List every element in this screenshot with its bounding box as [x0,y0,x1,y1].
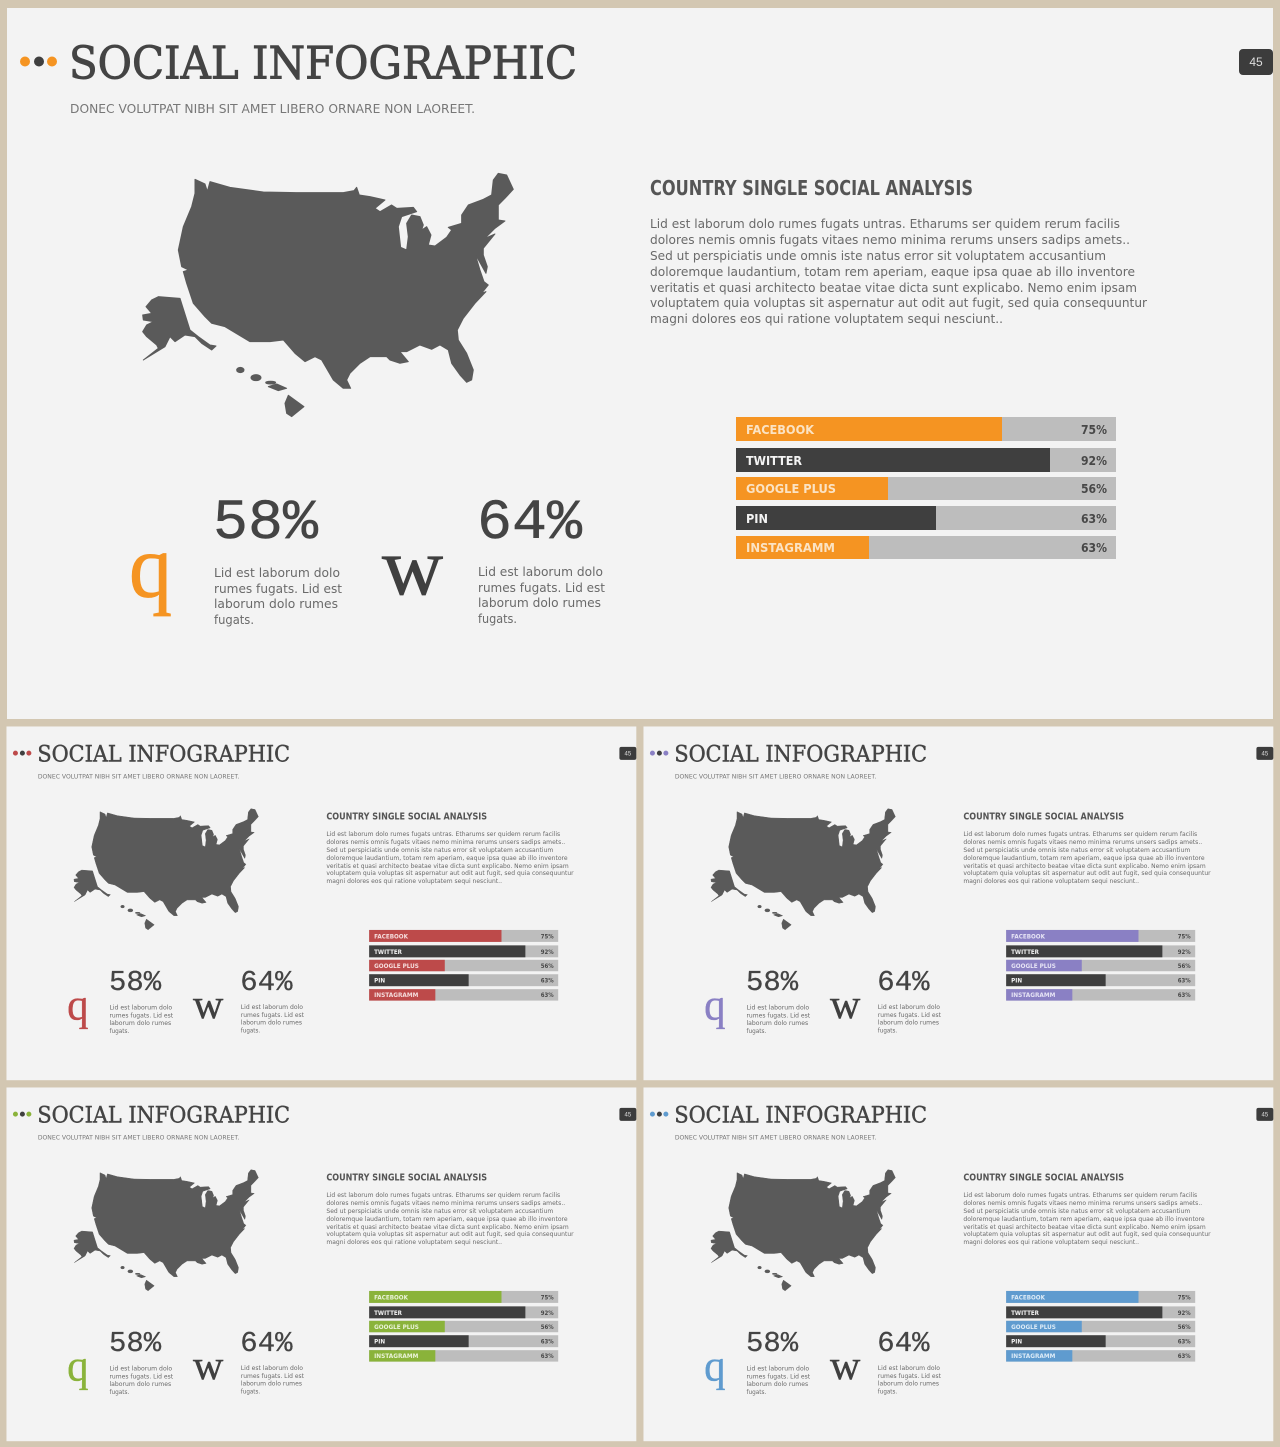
page number badge [619,1108,636,1121]
analysis text: veritatis et quasi architecto beatae vitae dicta sunt explicabo. Nemo enim ipsam [963,863,1206,870]
subtitle: DONEC VOLUTPAT NIBH SIT AMET LIBERO ORNARE NON LAOREET. [38,774,239,781]
stat: 58%: laborum dolo rumes [746,1381,808,1388]
bar chart: INSTAGRAMM [746,540,835,555]
slide: small purple [643,726,1273,1080]
title dots [650,751,668,756]
bar chart: 56% [1178,963,1191,970]
bar chart: FACEBOOK [746,422,815,437]
page number badge: 45 [1249,55,1263,69]
stat: 58%: rumes fugats. Lid est [214,582,342,597]
stat: 58%: fugats. [109,1028,129,1035]
bar chart: INSTAGRAMM [374,992,418,999]
analysis text [326,1192,574,1246]
stat: 58%: fugats. [109,1389,129,1396]
bar chart: 63% [1081,540,1107,555]
stat: 64%: w [830,1343,861,1388]
stat: 64%: fugats. [241,1388,260,1395]
analysis text: Sed ut perspiciatis unde omnis iste natus error sit voluptatem accusantium [650,249,1106,264]
stat: 64% [830,966,941,1034]
title dots [13,1112,31,1117]
page number badge [619,747,636,760]
bar chart: PIN [374,1339,385,1346]
bar chart: PIN [746,511,768,526]
stat: 64%: w [382,521,443,612]
stat: 64% [830,1327,941,1395]
bar chart: INSTAGRAMM [1011,1353,1055,1360]
stat: 64%: rumes fugats. Lid est [241,1012,304,1019]
stat: 64%: fugats. [241,1027,260,1034]
analysis text: Lid est laborum dolo rumes fugats untras. Etharums ser quidem rerum facilis [326,1192,560,1199]
stat: 58%: 58% [109,966,162,999]
page number badge: 45 [625,1112,632,1118]
stat: 64%: fugats. [478,612,517,627]
analysis text: Lid est laborum dolo rumes fugats untras. Etharums ser quidem rerum facilis [650,217,1120,232]
analysis text [650,217,1148,327]
analysis text: magni dolores eos qui ratione voluptatem sequi nesciunt.. [963,1239,1139,1246]
analysis text: Lid est laborum dolo rumes fugats untras. Etharums ser quidem rerum facilis [326,831,560,838]
bar chart: TWITTER [374,949,402,956]
analysis text: veritatis et quasi architecto beatae vitae dicta sunt explicabo. Nemo enim ipsam [326,1224,569,1231]
bar chart: 75% [1178,933,1191,940]
map of USA [74,809,258,930]
title dots [20,56,57,66]
stat: 58%: q [704,1341,726,1391]
analysis text: Sed ut perspiciatis unde omnis iste natus error sit voluptatem accusantium [963,847,1190,854]
stat: 58%: laborum dolo rumes [109,1020,171,1027]
title: SOCIAL INFOGRAPHIC [37,1103,290,1129]
slide: large orange [7,8,1273,719]
map of USA [711,809,895,930]
bar chart: 63% [541,1339,554,1346]
bar chart: GOOGLE PLUS [374,963,419,970]
subtitle: DONEC VOLUTPAT NIBH SIT AMET LIBERO ORNARE NON LAOREET. [675,774,876,781]
bar chart: TWITTER [746,453,802,468]
analysis text: Lid est laborum dolo rumes fugats untras. Etharums ser quidem rerum facilis [963,1192,1197,1199]
bar chart [369,1291,558,1362]
bar chart: 56% [1081,481,1107,496]
bar chart: INSTAGRAMM [374,1353,418,1360]
stat: 58%: fugats. [214,613,254,628]
stat: 64%: 64% [240,966,294,999]
stat: 64%: rumes fugats. Lid est [878,1373,941,1380]
bar chart: 63% [1178,992,1191,999]
analysis heading: COUNTRY SINGLE SOCIAL ANALYSIS [326,812,487,823]
stat: 64%: fugats. [878,1388,897,1395]
analysis text: voluptatem quia voluptas sit aspernatur aut odit aut fugit, sed quia consequuntur [326,870,574,877]
analysis text: doloremque laudantium, totam rem aperiam, eaque ipsa quae ab illo inventore [650,265,1135,280]
analysis text: dolores nemis omnis fugats vitaes nemo minima rerums unsers sadips amets.. [326,839,565,846]
stat: 58% [704,966,811,1035]
bar chart: GOOGLE PLUS [1011,1324,1056,1331]
bar chart: TWITTER [374,1310,402,1317]
stat: 58%: Lid est laborum dolo [746,1366,809,1373]
stat: 58%: fugats. [746,1389,766,1396]
bar chart [1006,1291,1195,1362]
bar chart: PIN [374,978,385,985]
analysis text: dolores nemis omnis fugats vitaes nemo minima rerums unsers sadips amets.. [963,1200,1202,1207]
analysis text: doloremque laudantium, totam rem aperiam, eaque ipsa quae ab illo inventore [326,855,568,862]
bar chart: 92% [1178,949,1191,956]
bar chart: GOOGLE PLUS [746,481,836,496]
bar chart: 75% [1178,1294,1191,1301]
stat: 64% [193,1327,304,1395]
bar chart: GOOGLE PLUS [374,1324,419,1331]
bar chart: 63% [1081,511,1107,526]
page number badge: 45 [1262,751,1269,757]
analysis text: magni dolores eos qui ratione voluptatem sequi nesciunt.. [963,878,1139,885]
bar chart: 75% [541,933,554,940]
bar chart: TWITTER [1011,949,1039,956]
page number badge: 45 [1262,1112,1269,1118]
bar chart: 63% [541,1353,554,1360]
page number badge [1256,747,1273,760]
page number badge [1256,1108,1273,1121]
stat: 58%: Lid est laborum dolo [746,1005,809,1012]
bar chart: PIN [1011,978,1022,985]
page number badge: 45 [625,751,632,757]
stat: 64%: Lid est laborum dolo [878,1004,940,1011]
stat: 58%: laborum dolo rumes [109,1381,171,1388]
bar chart: TWITTER [1011,1310,1039,1317]
stat: 58%: Lid est laborum dolo [109,1366,172,1373]
title: SOCIAL INFOGRAPHIC [674,1103,927,1129]
stat: 64%: rumes fugats. Lid est [478,581,605,596]
stat: 58%: 58% [213,492,319,556]
stat: 64% [382,492,605,627]
stat: 64%: w [830,982,861,1027]
stat: 64% [193,966,304,1034]
bar chart: 63% [1178,1353,1191,1360]
slide: small red [6,726,636,1080]
map of USA [711,1170,895,1291]
analysis text: voluptatem quia voluptas sit aspernatur aut odit aut fugit, sed quia consequuntur [650,296,1148,311]
stat: 64%: laborum dolo rumes [878,1019,939,1026]
stat: 64%: Lid est laborum dolo [241,1004,303,1011]
stat: 64%: 64% [877,966,931,999]
bar chart: 63% [541,978,554,985]
bar chart: 75% [541,1294,554,1301]
stat: 58%: q [67,1341,89,1391]
stat: 64%: Lid est laborum dolo [478,565,603,580]
stat: 64%: w [193,982,224,1027]
analysis heading: COUNTRY SINGLE SOCIAL ANALYSIS [326,1173,487,1184]
analysis text: magni dolores eos qui ratione voluptatem sequi nesciunt.. [326,1239,502,1246]
stat: 64%: laborum dolo rumes [878,1380,939,1387]
stat: 58% [129,492,342,628]
stat: 58%: 58% [109,1327,162,1360]
title dots [13,751,31,756]
bar chart: FACEBOOK [374,1294,408,1301]
analysis text: Lid est laborum dolo rumes fugats untras. Etharums ser quidem rerum facilis [963,831,1197,838]
bar chart: 56% [541,1324,554,1331]
stat: 58%: Lid est laborum dolo [214,566,340,581]
stat: 58%: rumes fugats. Lid est [746,1374,811,1381]
title: SOCIAL INFOGRAPHIC [69,36,577,90]
analysis text [963,1192,1211,1246]
analysis text: Sed ut perspiciatis unde omnis iste natus error sit voluptatem accusantium [963,1208,1190,1215]
analysis text: doloremque laudantium, totam rem aperiam, eaque ipsa quae ab illo inventore [963,855,1205,862]
subtitle: DONEC VOLUTPAT NIBH SIT AMET LIBERO ORNARE NON LAOREET. [38,1135,239,1142]
subtitle: DONEC VOLUTPAT NIBH SIT AMET LIBERO ORNARE NON LAOREET. [675,1135,876,1142]
stat: 64%: 64% [477,492,583,556]
analysis heading: COUNTRY SINGLE SOCIAL ANALYSIS [650,176,973,200]
stat: 64%: laborum dolo rumes [478,596,601,611]
stat: 58%: 58% [746,966,799,999]
title: SOCIAL INFOGRAPHIC [37,742,290,768]
analysis text: dolores nemis omnis fugats vitaes nemo minima rerums unsers sadips amets.. [963,839,1202,846]
stat: 58%: laborum dolo rumes [746,1020,808,1027]
bar chart: 92% [541,949,554,956]
analysis text [326,831,574,885]
analysis text: dolores nemis omnis fugats vitaes nemo minima rerums unsers sadips amets.. [326,1200,565,1207]
stat: 58%: q [67,980,89,1030]
title: SOCIAL INFOGRAPHIC [674,742,927,768]
stat: 64%: w [193,1343,224,1388]
analysis text: voluptatem quia voluptas sit aspernatur aut odit aut fugit, sed quia consequuntur [326,1231,574,1238]
analysis heading: COUNTRY SINGLE SOCIAL ANALYSIS [963,1173,1124,1184]
bar chart: 63% [1178,978,1191,985]
bar chart: FACEBOOK [374,933,408,940]
analysis text: veritatis et quasi architecto beatae vitae dicta sunt explicabo. Nemo enim ipsam [326,863,569,870]
title dots [650,1112,668,1117]
stat: 58%: fugats. [746,1028,766,1035]
bar chart: INSTAGRAMM [1011,992,1055,999]
stat: 64%: fugats. [878,1027,897,1034]
stat: 58% [704,1327,811,1396]
bar chart: 92% [1081,453,1107,468]
stat: 64%: laborum dolo rumes [241,1019,302,1026]
bar chart: 63% [1178,1339,1191,1346]
bar chart: 56% [541,963,554,970]
analysis text: dolores nemis omnis fugats vitaes nemo minima rerums unsers sadips amets.. [650,233,1130,248]
stat: 58%: rumes fugats. Lid est [109,1374,174,1381]
bar chart [369,930,558,1001]
stat: 58%: rumes fugats. Lid est [109,1013,174,1020]
stat: 64%: 64% [240,1327,294,1360]
bar chart: 92% [1178,1310,1191,1317]
bar chart: 92% [541,1310,554,1317]
bar chart [1006,930,1195,1001]
bar chart: GOOGLE PLUS [1011,963,1056,970]
analysis text: voluptatem quia voluptas sit aspernatur aut odit aut fugit, sed quia consequuntur [963,1231,1211,1238]
bar chart: FACEBOOK [1011,1294,1045,1301]
bar chart: PIN [1011,1339,1022,1346]
stat: 58%: q [704,980,726,1030]
analysis text: voluptatem quia voluptas sit aspernatur aut odit aut fugit, sed quia consequuntur [963,870,1211,877]
stat: 58%: 58% [746,1327,799,1360]
analysis text: veritatis et quasi architecto beatae vitae dicta sunt explicabo. Nemo enim ipsam [650,281,1137,296]
stat: 64%: Lid est laborum dolo [241,1365,303,1372]
analysis text: Sed ut perspiciatis unde omnis iste natus error sit voluptatem accusantium [326,1208,553,1215]
bar chart [736,417,1116,559]
analysis text: doloremque laudantium, totam rem aperiam, eaque ipsa quae ab illo inventore [326,1216,568,1223]
slide: small blue [643,1087,1273,1441]
analysis text: Sed ut perspiciatis unde omnis iste natus error sit voluptatem accusantium [326,847,553,854]
stat: 58%: Lid est laborum dolo [109,1005,172,1012]
slide: small green [6,1087,636,1441]
subtitle: DONEC VOLUTPAT NIBH SIT AMET LIBERO ORNARE NON LAOREET. [70,101,475,116]
stat: 64%: Lid est laborum dolo [878,1365,940,1372]
stat: 58% [67,1327,174,1396]
map of USA [74,1170,258,1291]
stat: 64%: rumes fugats. Lid est [878,1012,941,1019]
page number badge [1239,49,1273,75]
stat: 58%: laborum dolo rumes [214,597,338,612]
analysis text: magni dolores eos qui ratione voluptatem sequi nesciunt.. [326,878,502,885]
stat: 64%: rumes fugats. Lid est [241,1373,304,1380]
analysis heading: COUNTRY SINGLE SOCIAL ANALYSIS [963,812,1124,823]
bar chart: FACEBOOK [1011,933,1045,940]
analysis text: doloremque laudantium, totam rem aperiam, eaque ipsa quae ab illo inventore [963,1216,1205,1223]
bar chart: 63% [541,992,554,999]
analysis text: veritatis et quasi architecto beatae vitae dicta sunt explicabo. Nemo enim ipsam [963,1224,1206,1231]
stat: 58% [67,966,174,1035]
bar chart: 75% [1081,422,1107,437]
map of USA [143,173,513,417]
stat: 58%: rumes fugats. Lid est [746,1013,811,1020]
bar chart: 56% [1178,1324,1191,1331]
analysis text [963,831,1211,885]
stat: 58%: q [129,518,172,617]
analysis text: magni dolores eos qui ratione voluptatem sequi nesciunt.. [650,312,1003,327]
stat: 64%: 64% [877,1327,931,1360]
stat: 64%: laborum dolo rumes [241,1380,302,1387]
